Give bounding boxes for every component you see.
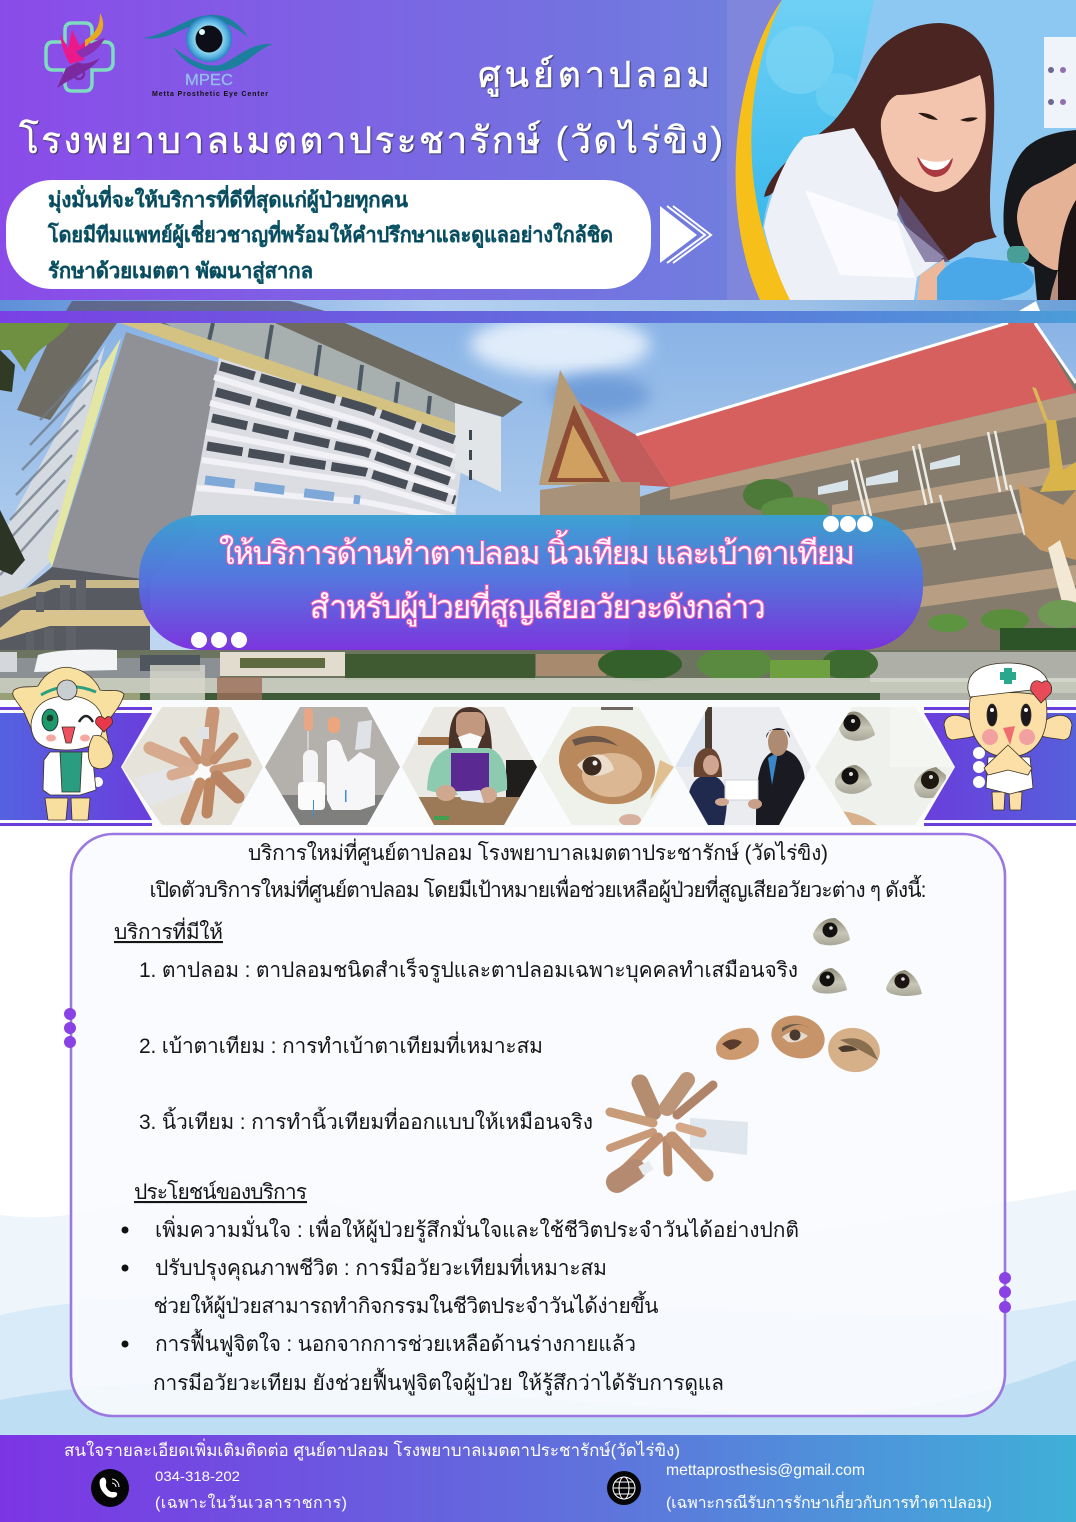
logo: MPEC eye: MPEC bbox=[185, 72, 233, 89]
wall chart bbox=[1044, 37, 1076, 128]
benefits: การฟื้นฟูจิตใจ : นอกจากการช่วยเหลือด้านร่างกายแล้ว bbox=[155, 1329, 636, 1357]
red roof building bbox=[539, 323, 1076, 660]
service banner: ให้บริการด้านทำตาปลอม นิ้วเทียม และเบ้าตาเทียม bbox=[219, 530, 855, 571]
card side dots bbox=[64, 1008, 1011, 1313]
nurse mascot bbox=[944, 663, 1072, 810]
logo: MPEC eye bbox=[143, 15, 273, 98]
doctor coat bbox=[764, 128, 950, 300]
services list: 1. ตาปลอม : ตาปลอมชนิดสำเร็จรูปและตาปลอมเฉพาะบุคคลทำเสมือนจริง bbox=[139, 956, 798, 983]
footer: สนใจรายละเอียดเพิ่มเติมติดต่อ ศูนย์ตาปลอม โรงพยาบาลเมตตาประชารักษ์(วัดไร่ขิง) bbox=[64, 1438, 680, 1461]
mission statement pill: โดยมีทีมแพทย์ผู้เชี่ยวชาญที่พร้อมให้คำปรึกษาและดูแลอย่างใกล้ชิด bbox=[47, 219, 613, 249]
footer bbox=[0, 1435, 1076, 1522]
header photo: doctor fitting a prosthetic eye bbox=[727, 0, 1076, 300]
services list bbox=[114, 917, 798, 1134]
image: prosthetic fingers bbox=[610, 1080, 748, 1182]
benefits: การมีอวัยวะเทียม ยังช่วยฟื้นฟูจิตใจผู้ป่วย ให้รู้สึกว่าได้รับการดูแล bbox=[153, 1368, 724, 1396]
email contact bbox=[607, 1462, 992, 1512]
benefits bbox=[122, 1180, 799, 1396]
mission statement pill: มุ่งมั่นที่จะให้บริการที่ดีที่สุดแก่ผู้ป่วยทุกคน bbox=[48, 184, 409, 214]
email contact: mettaprosthesis@gmail.com bbox=[666, 1462, 865, 1479]
mission statement pill: รักษาด้วยเมตตา พัฒนาสู่สากล bbox=[48, 259, 313, 285]
phone contact: (เฉพาะในวันเวลาราชการ) bbox=[155, 1493, 347, 1512]
phone contact: 034-318-202 bbox=[155, 1468, 240, 1484]
doctor arm and glove bbox=[917, 257, 1034, 300]
mission statement pill bbox=[6, 180, 651, 289]
gardens and driveway bbox=[0, 647, 1076, 701]
benefits: ประโยชน์ของบริการ bbox=[134, 1180, 307, 1204]
services card bbox=[64, 834, 1011, 1416]
doctor hair bbox=[764, 23, 997, 262]
logo: hospital emblem bbox=[46, 13, 113, 91]
phone contact bbox=[91, 1468, 347, 1512]
card intro bbox=[150, 838, 926, 903]
hexagon photo: prosthetic fingers bbox=[120, 707, 265, 827]
service banner bbox=[139, 515, 923, 650]
hexagon photo: prosthetic eye close-up bbox=[538, 707, 674, 827]
hexagon photo: technician at work bbox=[402, 707, 538, 827]
benefits: ปรับปรุงคุณภาพชีวิต : การมีอวัยวะเทียมที่เหมาะสม bbox=[155, 1253, 607, 1281]
card intro: เปิดตัวบริการใหม่ที่ศูนย์ตาปลอม โดยมีเป้าหมายเพื่อช่วยเหลือผู้ป่วยที่สูญเสียอวัยวะต่าง ๆ ดังนี้: bbox=[150, 875, 926, 903]
tower building bbox=[0, 323, 523, 660]
divider strip bbox=[0, 300, 1076, 323]
hexagon photo: prosthetic eyes bbox=[813, 707, 955, 827]
doctor face bbox=[881, 75, 986, 192]
title: โรงพยาบาลเมตตาประชารักษ์ (วัดไร่ขิง) bbox=[19, 119, 723, 161]
doctor mascot bbox=[13, 667, 124, 820]
benefits: เพิ่มความมั่นใจ : เพื่อให้ผู้ป่วยรู้สึกมั่นใจและใช้ชีวิตประจำวันได้อย่างปกติ bbox=[155, 1215, 799, 1243]
patient bbox=[1004, 130, 1076, 300]
image: prosthetic eyes bbox=[812, 918, 922, 996]
hexagon photo: certificate handover bbox=[675, 707, 811, 827]
email contact: (เฉพาะกรณีรับการรักษาเกี่ยวกับการทำตาปลอม) bbox=[666, 1491, 992, 1512]
photo hexagon band bbox=[0, 700, 1076, 827]
card intro: บริการใหม่ที่ศูนย์ตาปลอม โรงพยาบาลเมตตาประชารักษ์ (วัดไร่ขิง) bbox=[248, 838, 828, 866]
arrow chevrons bbox=[660, 206, 711, 263]
right purple chevron bbox=[924, 707, 1076, 826]
title: ศูนย์ตาปลอม bbox=[478, 54, 710, 97]
logo: MPEC eye: Metta Prosthetic Eye Center bbox=[152, 91, 268, 98]
hexagon photo: finger moulds bbox=[264, 707, 402, 827]
image: eye sockets bbox=[716, 1010, 883, 1076]
hospital photo bbox=[0, 315, 1076, 701]
header band bbox=[0, 0, 1076, 300]
services list: 3. นิ้วเทียม : การทำนิ้วเทียมที่ออกแบบให้เหมือนจริง bbox=[139, 1107, 593, 1134]
services list: 2. เบ้าตาเทียม : การทำเบ้าตาเทียมที่เหมาะสม bbox=[139, 1031, 543, 1058]
page wave background bbox=[0, 1180, 1076, 1436]
title bbox=[19, 54, 723, 161]
services list: บริการที่มีให้ bbox=[114, 917, 223, 944]
left purple chevron bbox=[0, 707, 152, 826]
service banner: สำหรับผู้ป่วยที่สูญเสียอวัยวะดังกล่าว bbox=[310, 585, 766, 627]
benefits: ช่วยให้ผู้ป่วยสามารถทำกิจกรรมในชีวิตประจำวันได้ง่ายขึ้น bbox=[153, 1291, 658, 1319]
